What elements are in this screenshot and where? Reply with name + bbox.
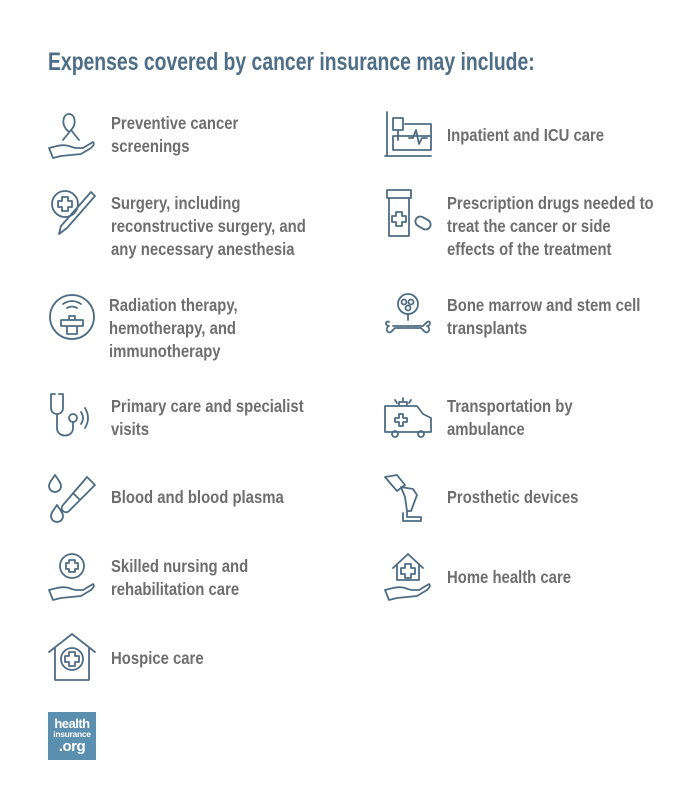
logo [48,712,96,760]
text: nursing [111,556,248,599]
text: surgery [111,193,306,259]
text: hospice: Hospice care [111,648,204,668]
icon: prosthetic [384,474,422,522]
logo: .org [59,738,85,754]
logo: insurance [53,729,91,739]
text: preventive: Preventive cancer [111,113,238,133]
icon: blood [48,474,96,523]
text: prescription: effects of the treatment [447,239,611,259]
title: Expenses covered by cancer insurance may include: [48,48,535,76]
text: primary care [111,396,304,439]
icon: ambulance [384,397,432,438]
icon: stethoscope [50,393,89,436]
icon: radiation [49,294,95,340]
text: ambulance: Transportation by [447,396,573,416]
text: radiation: hemotherapy, and [109,318,236,338]
icon: hospice [48,633,96,681]
text: surgery: reconstructive surgery, and [111,216,306,236]
icon: inpatient [384,111,432,157]
text: prescription: Prescription drugs needed to [447,193,654,213]
text: radiation: Radiation therapy, [109,295,238,315]
text: blood: Blood and blood plasma [111,487,284,507]
text: surgery: Surgery, including [111,193,240,213]
text: nursing: Skilled nursing and [111,556,248,576]
text: home health: Home health care [447,567,571,587]
text: surgery: any necessary anesthesia [111,239,295,259]
text: ambulance [447,396,573,439]
text: prosthetic: Prosthetic devices [447,487,578,507]
logo: health [54,716,90,731]
icon: prescription [386,189,432,237]
icon: nursing [48,553,95,601]
icon: ribbon hand [48,113,95,159]
text: nursing: rehabilitation care [111,579,239,599]
text: bone marrow [447,295,640,338]
icon: home health [384,553,431,601]
text: inpatient: Inpatient and ICU care [447,125,604,145]
text: radiation: immunotherapy [109,341,221,361]
text: primary care: Primary care and specialist [111,396,304,416]
text: bone marrow: transplants [447,318,527,338]
icon: bone marrow [385,293,431,334]
text: prescription [447,193,654,259]
text: radiation [109,295,238,361]
text: primary care: visits [111,419,149,439]
text: bone marrow: Bone marrow and stem cell [447,295,640,315]
text: preventive: screenings [111,136,190,156]
text: preventive [111,113,238,156]
text: prescription: treat the cancer or side [447,216,611,236]
text: ambulance: ambulance [447,419,525,439]
icon: surgery [51,190,96,235]
